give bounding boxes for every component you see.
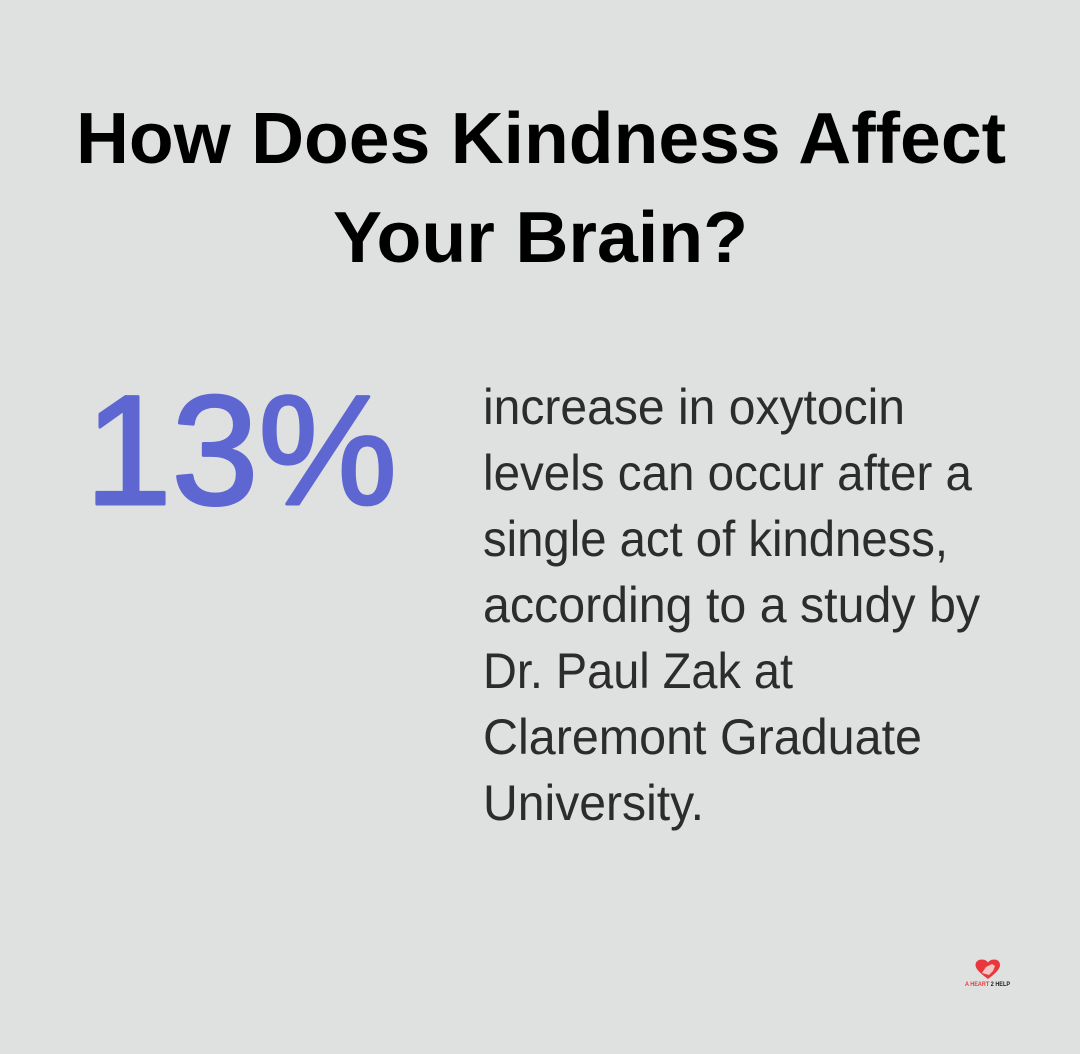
description text: University.: [483, 775, 704, 831]
description text: Claremont Graduate: [483, 709, 922, 765]
description text: increase in oxytocin: [483, 379, 905, 435]
logo: A Heart 2 Help: [965, 960, 1011, 988]
title: [76, 99, 1006, 278]
icon: hands: [982, 964, 995, 975]
description text: Dr. Paul Zak at: [483, 643, 793, 699]
description text: levels can occur after a: [483, 445, 972, 501]
description text: [483, 379, 980, 831]
logo wordmark: A HEART 2 HELP: [965, 981, 1011, 988]
title: How Does Kindness Affect: [76, 99, 1006, 179]
description text: single act of kindness,: [483, 511, 948, 567]
description text: according to a study by: [483, 577, 980, 633]
title: Your Brain?: [333, 198, 748, 278]
icon: heart: [976, 960, 1000, 979]
big statistic: 13%: 13%: [85, 364, 397, 538]
